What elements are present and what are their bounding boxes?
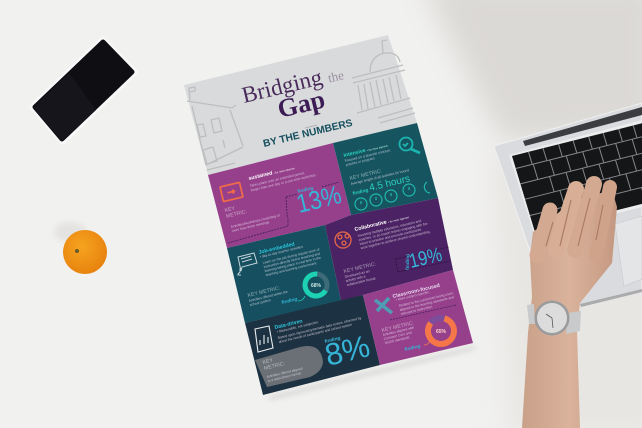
icon: magnifier (400, 138, 420, 153)
phone (33, 40, 134, 141)
title: Gap (275, 85, 328, 124)
panel: collaborative: 19% (407, 244, 444, 273)
panel: classroom-focused: Related to the curriculum being used, (398, 291, 454, 308)
panel: job-embedded: teaching and learning environment. (265, 261, 318, 277)
panel: intensive: finding (352, 187, 369, 197)
title: BY THE NUMBERS (262, 118, 354, 150)
panel: data-driven: Based upon rigorous/systematic data review, informed by (277, 316, 362, 340)
panel: sustained: more than three meetings (231, 220, 270, 233)
panel: collaborative: finding (405, 254, 411, 270)
icon: chart (255, 326, 273, 352)
panel: job-embedded: finding (281, 296, 298, 306)
panel: data-driven: finding (324, 335, 341, 345)
panel: job-embedded: instruction-directly tied to teaching and (263, 252, 321, 269)
panel: classroom-focused: finding (404, 343, 421, 353)
panel: sustained (208, 143, 351, 248)
icon: group (335, 232, 351, 248)
panel: data-driven: Data-driven (274, 318, 303, 331)
panel: classroom-focused: NGSS standards (384, 335, 410, 345)
panel: data-driven (245, 295, 380, 395)
panel: intensive: Average length of all activities (in hours) (350, 168, 410, 186)
panel: job-embedded: • day-to-day teacher activities (259, 245, 304, 259)
panel: sustained: finding (297, 185, 314, 195)
donut: 68%: 68% (311, 283, 322, 289)
panel: intensive: 4.5 hours (368, 173, 411, 194)
panel: intensive (333, 123, 438, 215)
panel: data-driven: to a data-driven format (267, 371, 301, 383)
panel: collaborative (325, 198, 453, 301)
panel: classroom-focused: KEY METRIC: (381, 320, 415, 334)
panel: collaborative: coaches, or an expert trainer engaging with the (358, 222, 428, 242)
panel: sustained: METRIC: (225, 209, 248, 220)
panel: sustained: Takes place over an extended period; (249, 171, 305, 188)
panel: intensive: KEY METRIC: (349, 168, 383, 182)
panel: sustained: KEY (224, 206, 236, 214)
hand and arm (522, 184, 617, 428)
clock icons (355, 182, 430, 210)
panel: collaborative: Collaborative • for more rigorous (354, 214, 410, 233)
panel: sustained: sustained • for more rigorous (248, 165, 296, 182)
panel: intensive: Intensive • for more rigorous (343, 142, 389, 159)
panel: job-embedded (227, 225, 341, 323)
wristwatch (527, 300, 581, 336)
panel: classroom-focused: Common Core and (383, 330, 412, 341)
icon: speech (238, 253, 257, 275)
panel: job-embedded: KEY METRIC: (247, 285, 281, 299)
laptop (494, 103, 642, 307)
panel: job-embedded: school system (249, 298, 271, 307)
poster header panel (184, 35, 417, 175)
panel: collaborative: activity with a (345, 274, 366, 283)
orange (54, 222, 107, 274)
panel: intensive: Focused on a discrete concept, (344, 148, 391, 163)
title: Bridging the (239, 59, 346, 108)
panel: job-embedded: Activities offered within the (248, 290, 288, 303)
panel: intensive: practice or program. (345, 156, 376, 167)
panel: collaborative: KEY METRIC: (343, 261, 377, 275)
donut: 65%: 65% (436, 329, 447, 335)
icon: capitol building (352, 40, 415, 123)
icon: crossed tools (375, 298, 392, 313)
panel: collaborative: Developed as an (344, 269, 370, 279)
keyboard keys (512, 121, 642, 231)
panel: data-driven: 8% (321, 328, 373, 373)
icon: screen (220, 182, 243, 202)
panel: job-embedded: Learn on the job during regular work of (262, 247, 320, 265)
panel: data-driven: • Measurable, not subjective (276, 320, 319, 334)
panel: classroom-focused: relevant to instruction. (400, 304, 434, 316)
grey metric pill (255, 346, 323, 387)
panel: collaborative: Involving multiple educators, educators and (357, 219, 422, 238)
panel: data-driven: KEY (262, 358, 274, 366)
panel: classroom-focused: Classroom-focused (392, 283, 441, 300)
panel: classroom-focused: aligned to the learning standards and (399, 295, 455, 312)
poster shadow (268, 346, 476, 400)
panel: classroom-focused (363, 270, 473, 365)
panel: job-embedded: Job-embedded (258, 241, 295, 256)
panel: collaborative: collaborative format (346, 276, 376, 287)
panel: data-driven: about the needs of participants and school system (278, 323, 353, 344)
panel: sustained: Activities/workshops consisting of (230, 213, 280, 229)
title (239, 59, 354, 150)
panel: classroom-focused: Activities aligned with (382, 326, 415, 337)
panel: collaborative: work together to achieve shared understanding. (360, 230, 431, 250)
poster (184, 35, 473, 395)
panel: job-embedded: learning taking place in real time in the (264, 256, 322, 273)
panel: classroom-focused: • More subject-specific, (395, 290, 430, 302)
panel: data-driven: Activities offered aligned (266, 367, 303, 379)
icon: school house (187, 87, 243, 170)
panel: sustained: 13% (293, 179, 344, 219)
trackpad (615, 216, 642, 286)
panel: sustained: longer than one day or a one-time workshop. (250, 173, 317, 192)
panel: collaborative: intent to practice and promote participants (359, 227, 422, 246)
panel: data-driven: METRIC: (263, 361, 286, 372)
